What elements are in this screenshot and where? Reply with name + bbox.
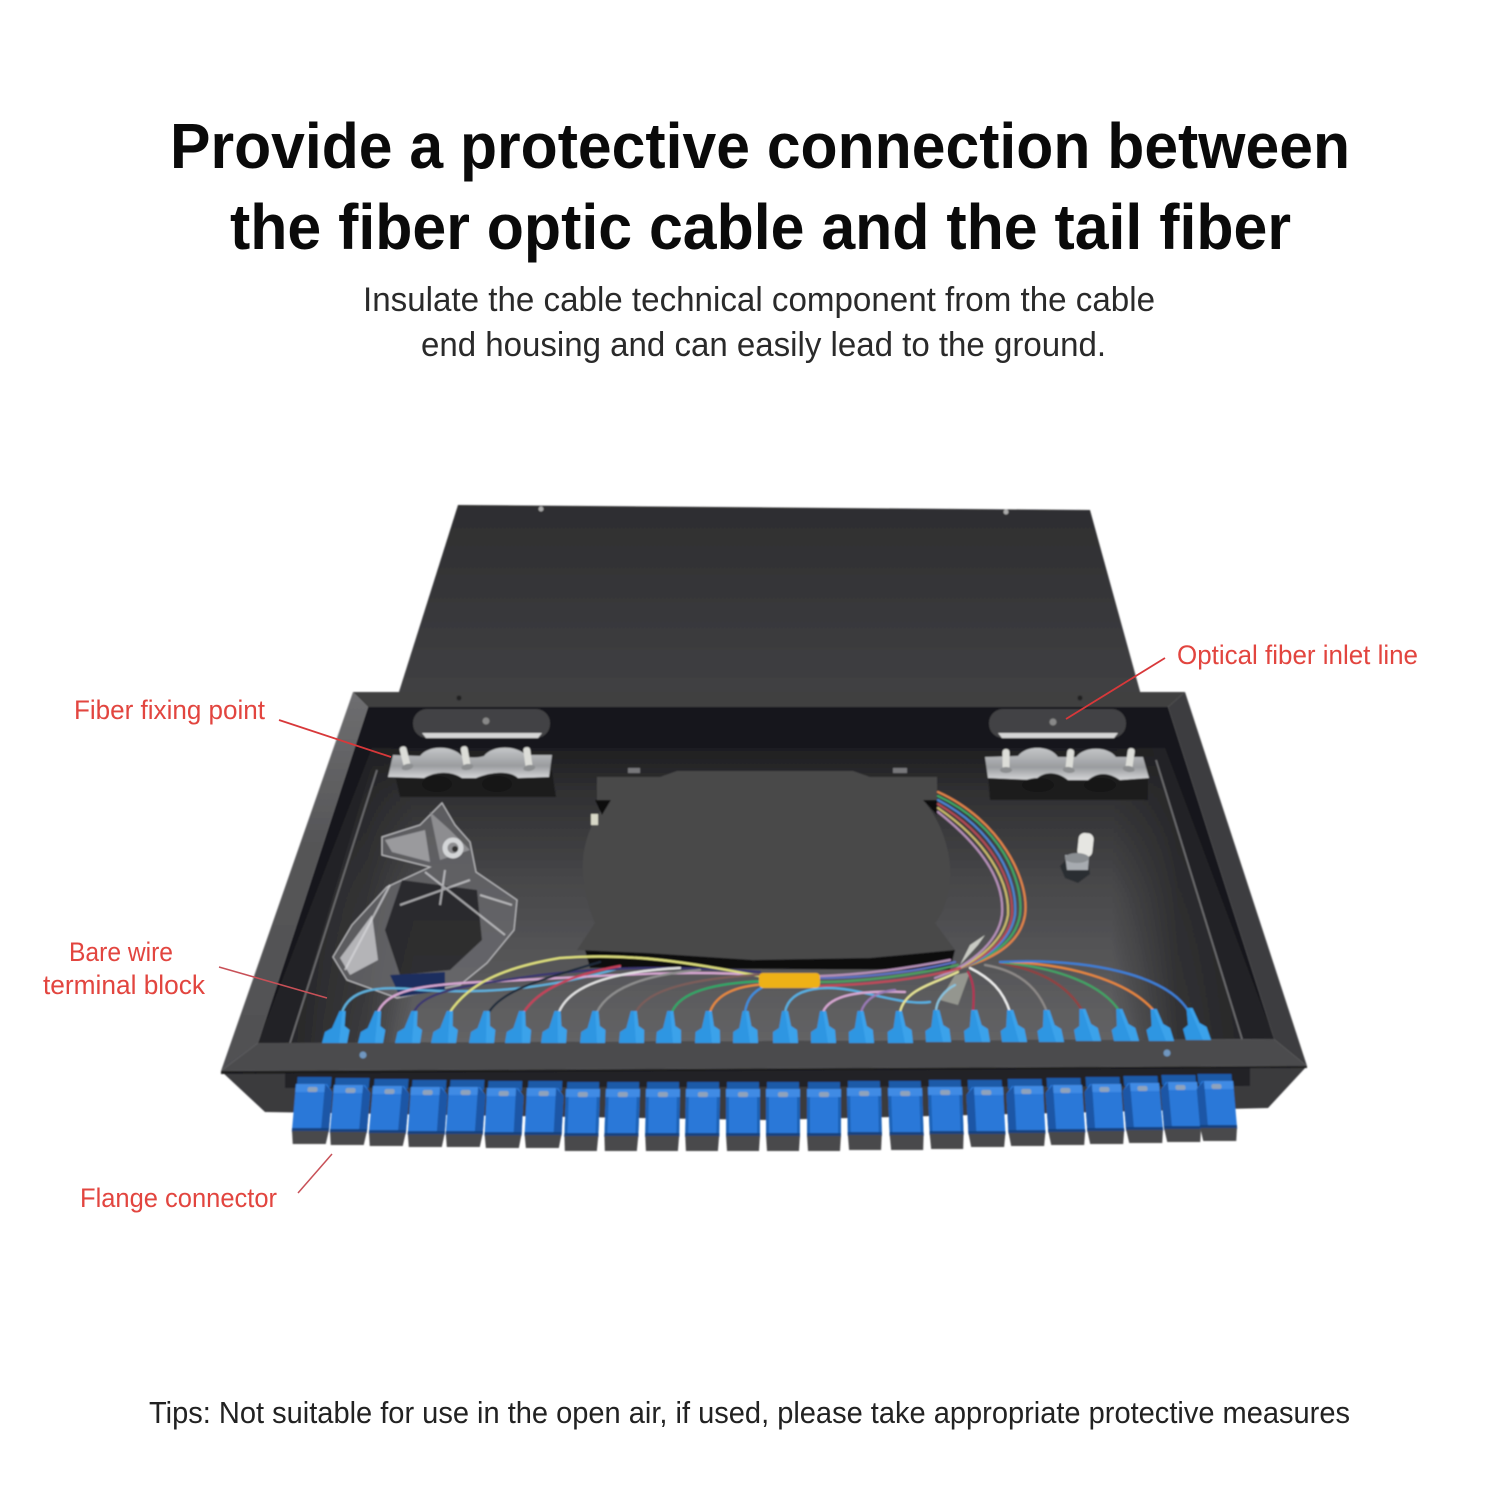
front face of tray [221, 1066, 1307, 1120]
yellow fiber sleeve [759, 973, 820, 988]
product photo: fiber optic patch panel [221, 505, 1307, 1151]
callout: fiber fixing point [74, 695, 391, 757]
coloured fiber loop from tray to bundle [935, 792, 1026, 1005]
subtitle text: end housing and can easily lead to the ground. [421, 326, 1106, 364]
subtitle text [363, 281, 1155, 364]
tips text: Tips: Not suitable for use in the open air, if used, please take appropriate protective measures [149, 1395, 1350, 1430]
callout: optical fiber inlet line: Optical fiber inlet line [1177, 640, 1418, 670]
tray floor and walls [258, 707, 1274, 1043]
bolt accessory bag [333, 803, 517, 998]
SC flange connectors [291, 1074, 1238, 1151]
right slot plate [989, 709, 1126, 738]
left slot plate [413, 709, 550, 738]
left fibers [342, 956, 770, 1012]
right fibers [785, 960, 1189, 1012]
title: the fiber optic cable and the tail fiber [230, 191, 1291, 263]
right fiber clamp [985, 747, 1149, 800]
grounding bolt [1060, 832, 1094, 883]
left fiber clamp [388, 745, 556, 797]
callout: optical fiber inlet line [1066, 640, 1418, 719]
callout: bare wire terminal block: terminal block [43, 970, 205, 1000]
callout: bare wire terminal block [43, 937, 327, 1000]
lid [398, 505, 1141, 695]
callout: fiber fixing point: Fiber fixing point [74, 695, 265, 725]
callout: flange connector [80, 1154, 332, 1213]
title: Provide a protective connection between [170, 110, 1350, 182]
tray frame [221, 692, 1307, 1074]
subtitle text: Insulate the cable technical component from the cable [363, 281, 1155, 319]
callout: bare wire terminal block: Bare wire [69, 937, 173, 967]
callout: flange connector: Flange connector [80, 1183, 277, 1213]
fiber splice tray [577, 768, 955, 970]
inner boots [322, 1008, 1211, 1043]
title [170, 110, 1350, 263]
